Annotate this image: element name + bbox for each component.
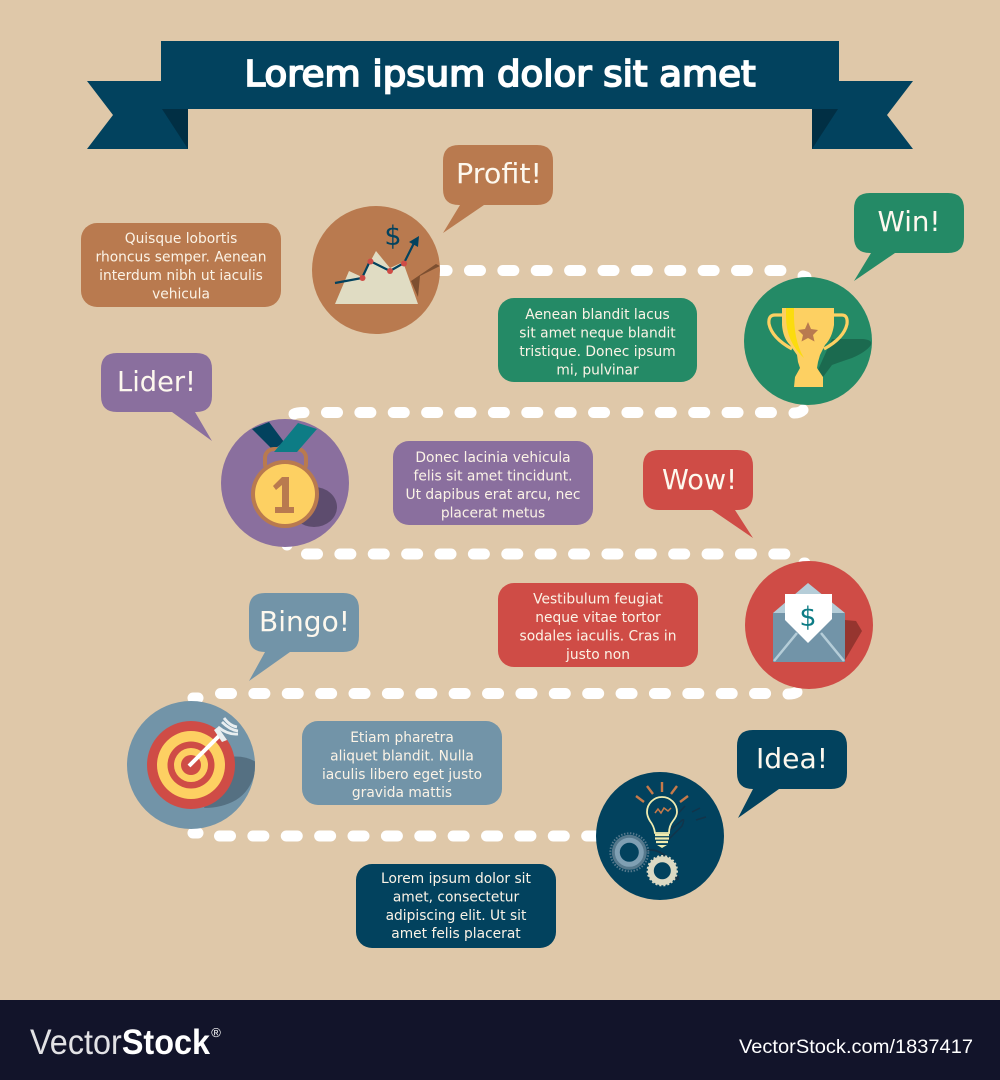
text block: idea: Lorem ipsum dolor sit (381, 871, 532, 887)
speech bubble: Idea (737, 730, 847, 818)
text block: bingo (302, 721, 502, 805)
icon: mountain chart (312, 206, 440, 334)
icon: bulb and gears (596, 772, 724, 900)
text block: wow: neque vitae tortor (535, 610, 661, 626)
icon: medal (221, 419, 349, 547)
text block: profit: vehicula (152, 286, 210, 302)
text block: lider: placerat metus (441, 506, 545, 522)
speech bubble: Profit: Profit! (456, 157, 542, 190)
text block: profit: Quisque lobortis (125, 231, 237, 247)
speech bubble: Win (854, 193, 964, 281)
icon: trophy (744, 277, 872, 405)
text block: lider: Ut dapibus erat arcu, nec (406, 487, 580, 503)
panel: win (498, 193, 964, 405)
text block: win: mi, pulvinar (556, 362, 639, 378)
speech bubble: Bingo: Bingo! (259, 605, 350, 638)
speech bubble: Idea: Idea! (756, 742, 828, 775)
footer bar (0, 1000, 1000, 1080)
text block: lider: felis sit amet tincidunt. (413, 468, 573, 484)
text block: bingo: gravida mattis (352, 785, 452, 801)
panel: bingo (127, 593, 502, 829)
footer registered mark: ® (211, 1025, 221, 1040)
speech bubble: Win: Win! (878, 205, 940, 238)
text block: idea: amet, consectetur (393, 890, 519, 906)
speech bubble: Wow: Wow! (662, 463, 737, 496)
title: Lorem ipsum dolor sit amet (244, 54, 756, 95)
text block: wow (498, 583, 698, 667)
footer url: VectorStock.com/1837417 (739, 1036, 973, 1058)
icon: envelope (745, 561, 873, 689)
text block: bingo: Etiam pharetra (350, 730, 454, 746)
speech bubble: Profit (443, 145, 553, 233)
text block: lider: Donec lacinia vehicula (415, 450, 571, 466)
text block: win (498, 298, 697, 382)
panel: profit (81, 145, 553, 334)
text block: win: sit amet neque blandit (519, 326, 676, 342)
text block: profit: interdum nibh ut iaculis (99, 268, 263, 284)
text block: profit (81, 223, 281, 307)
speech bubble: Wow (643, 450, 753, 538)
text block: idea: adipiscing elit. Ut sit (386, 908, 527, 924)
text block: idea (356, 864, 556, 948)
speech bubble: Lider (101, 353, 212, 441)
icon: mountain chart: $ (384, 221, 402, 252)
footer logo: VectorStock (30, 1022, 210, 1062)
panel: idea (356, 730, 847, 948)
text block: bingo: iaculis libero eget justo (322, 767, 482, 783)
title banner (87, 41, 913, 149)
panel: wow (498, 450, 873, 689)
text block: profit: rhoncus semper. Aenean (96, 250, 266, 266)
text block: win: tristique. Donec ipsum (519, 344, 676, 360)
speech bubble: Lider: Lider! (117, 365, 196, 398)
text block: wow: justo non (565, 647, 630, 663)
text block: wow: sodales iaculis. Cras in (520, 628, 676, 644)
text block: bingo: aliquet blandit. Nulla (330, 748, 474, 764)
text block: wow: Vestibulum feugiat (533, 592, 663, 608)
speech bubble: Bingo (249, 593, 359, 681)
panel: lider (101, 353, 593, 547)
dashed path (193, 270, 806, 836)
icon: envelope: $ (799, 602, 817, 633)
icon: target (127, 701, 256, 829)
text block: idea: amet felis placerat (391, 926, 521, 942)
text block: lider (393, 441, 593, 525)
text block: win: Aenean blandit lacus (525, 307, 670, 323)
